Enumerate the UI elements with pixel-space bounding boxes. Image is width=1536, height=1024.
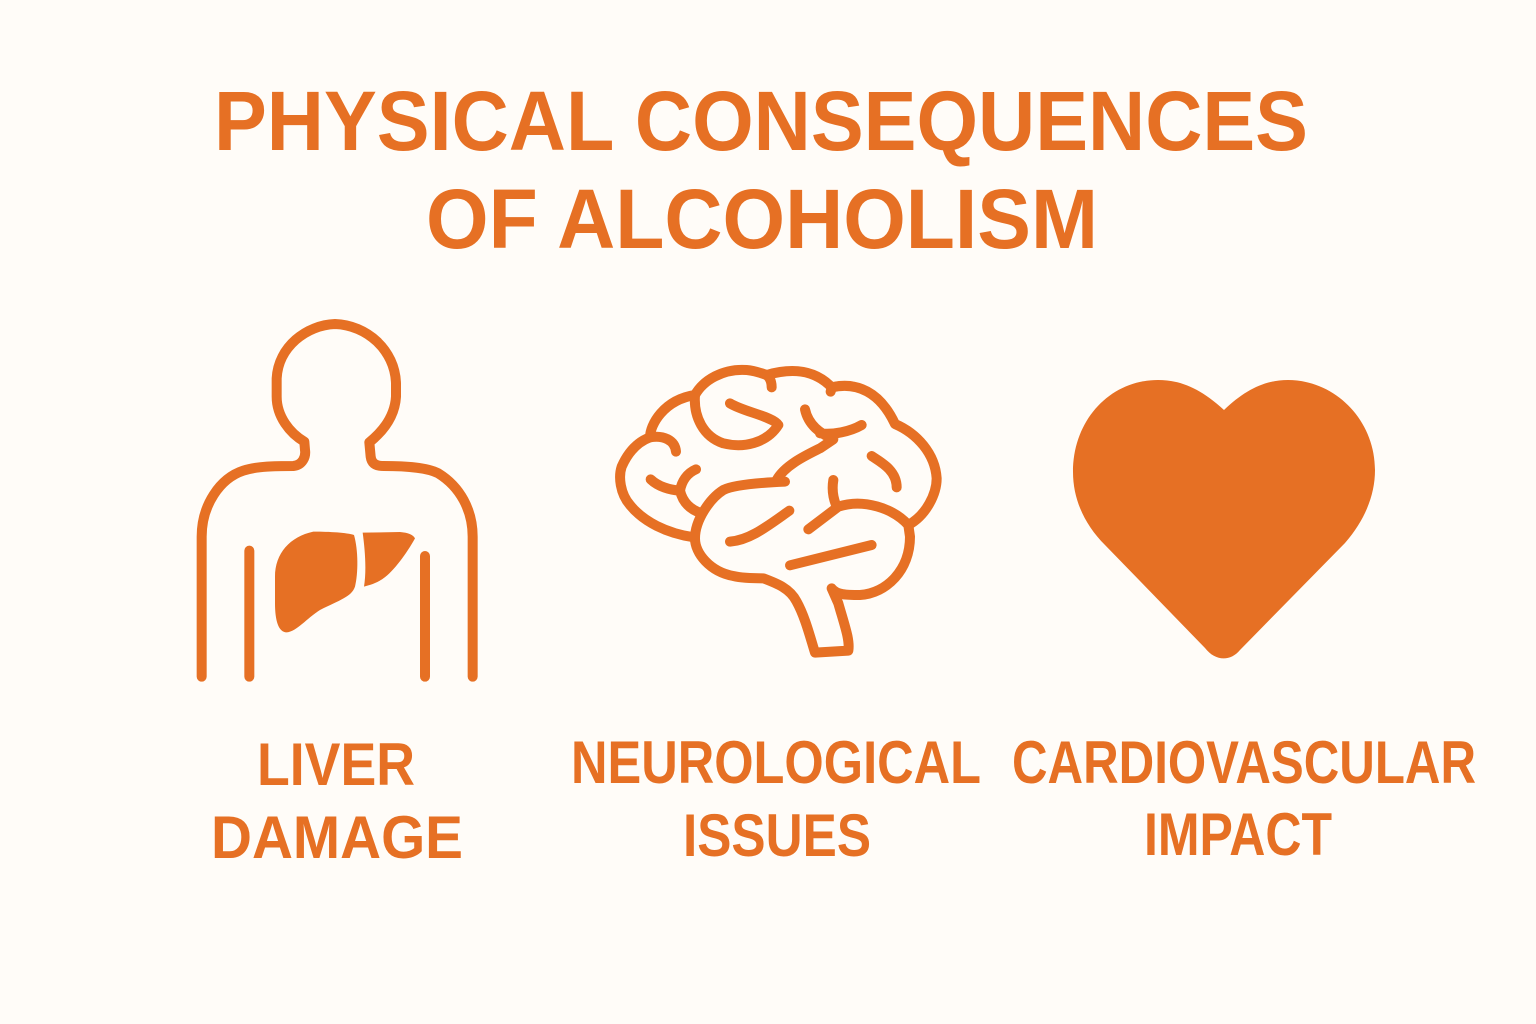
- label: neurological issues: ISSUES: [683, 802, 871, 869]
- icon: brain: [620, 370, 937, 653]
- label: neurological issues: NEUROLOGICAL: [571, 729, 981, 796]
- panel: liver damage: [202, 324, 473, 871]
- label: liver damage: DAMAGE: [211, 804, 463, 871]
- label: liver damage: LIVER: [257, 731, 415, 798]
- icon: human torso with liver: [202, 324, 473, 677]
- title: PHYSICAL CONSEQUENCES: [214, 74, 1308, 168]
- title: [214, 74, 1308, 266]
- title: OF ALCOHOLISM: [426, 172, 1098, 266]
- label: cardiovascular impact: IMPACT: [1144, 801, 1332, 868]
- label: neurological issues: [571, 729, 981, 869]
- icon: heart: [1073, 380, 1375, 658]
- label: cardiovascular impact: [1012, 729, 1476, 868]
- panel: neurological issues: [571, 370, 981, 869]
- label: liver damage: [211, 731, 463, 871]
- panel: cardiovascular impact: [1012, 380, 1476, 868]
